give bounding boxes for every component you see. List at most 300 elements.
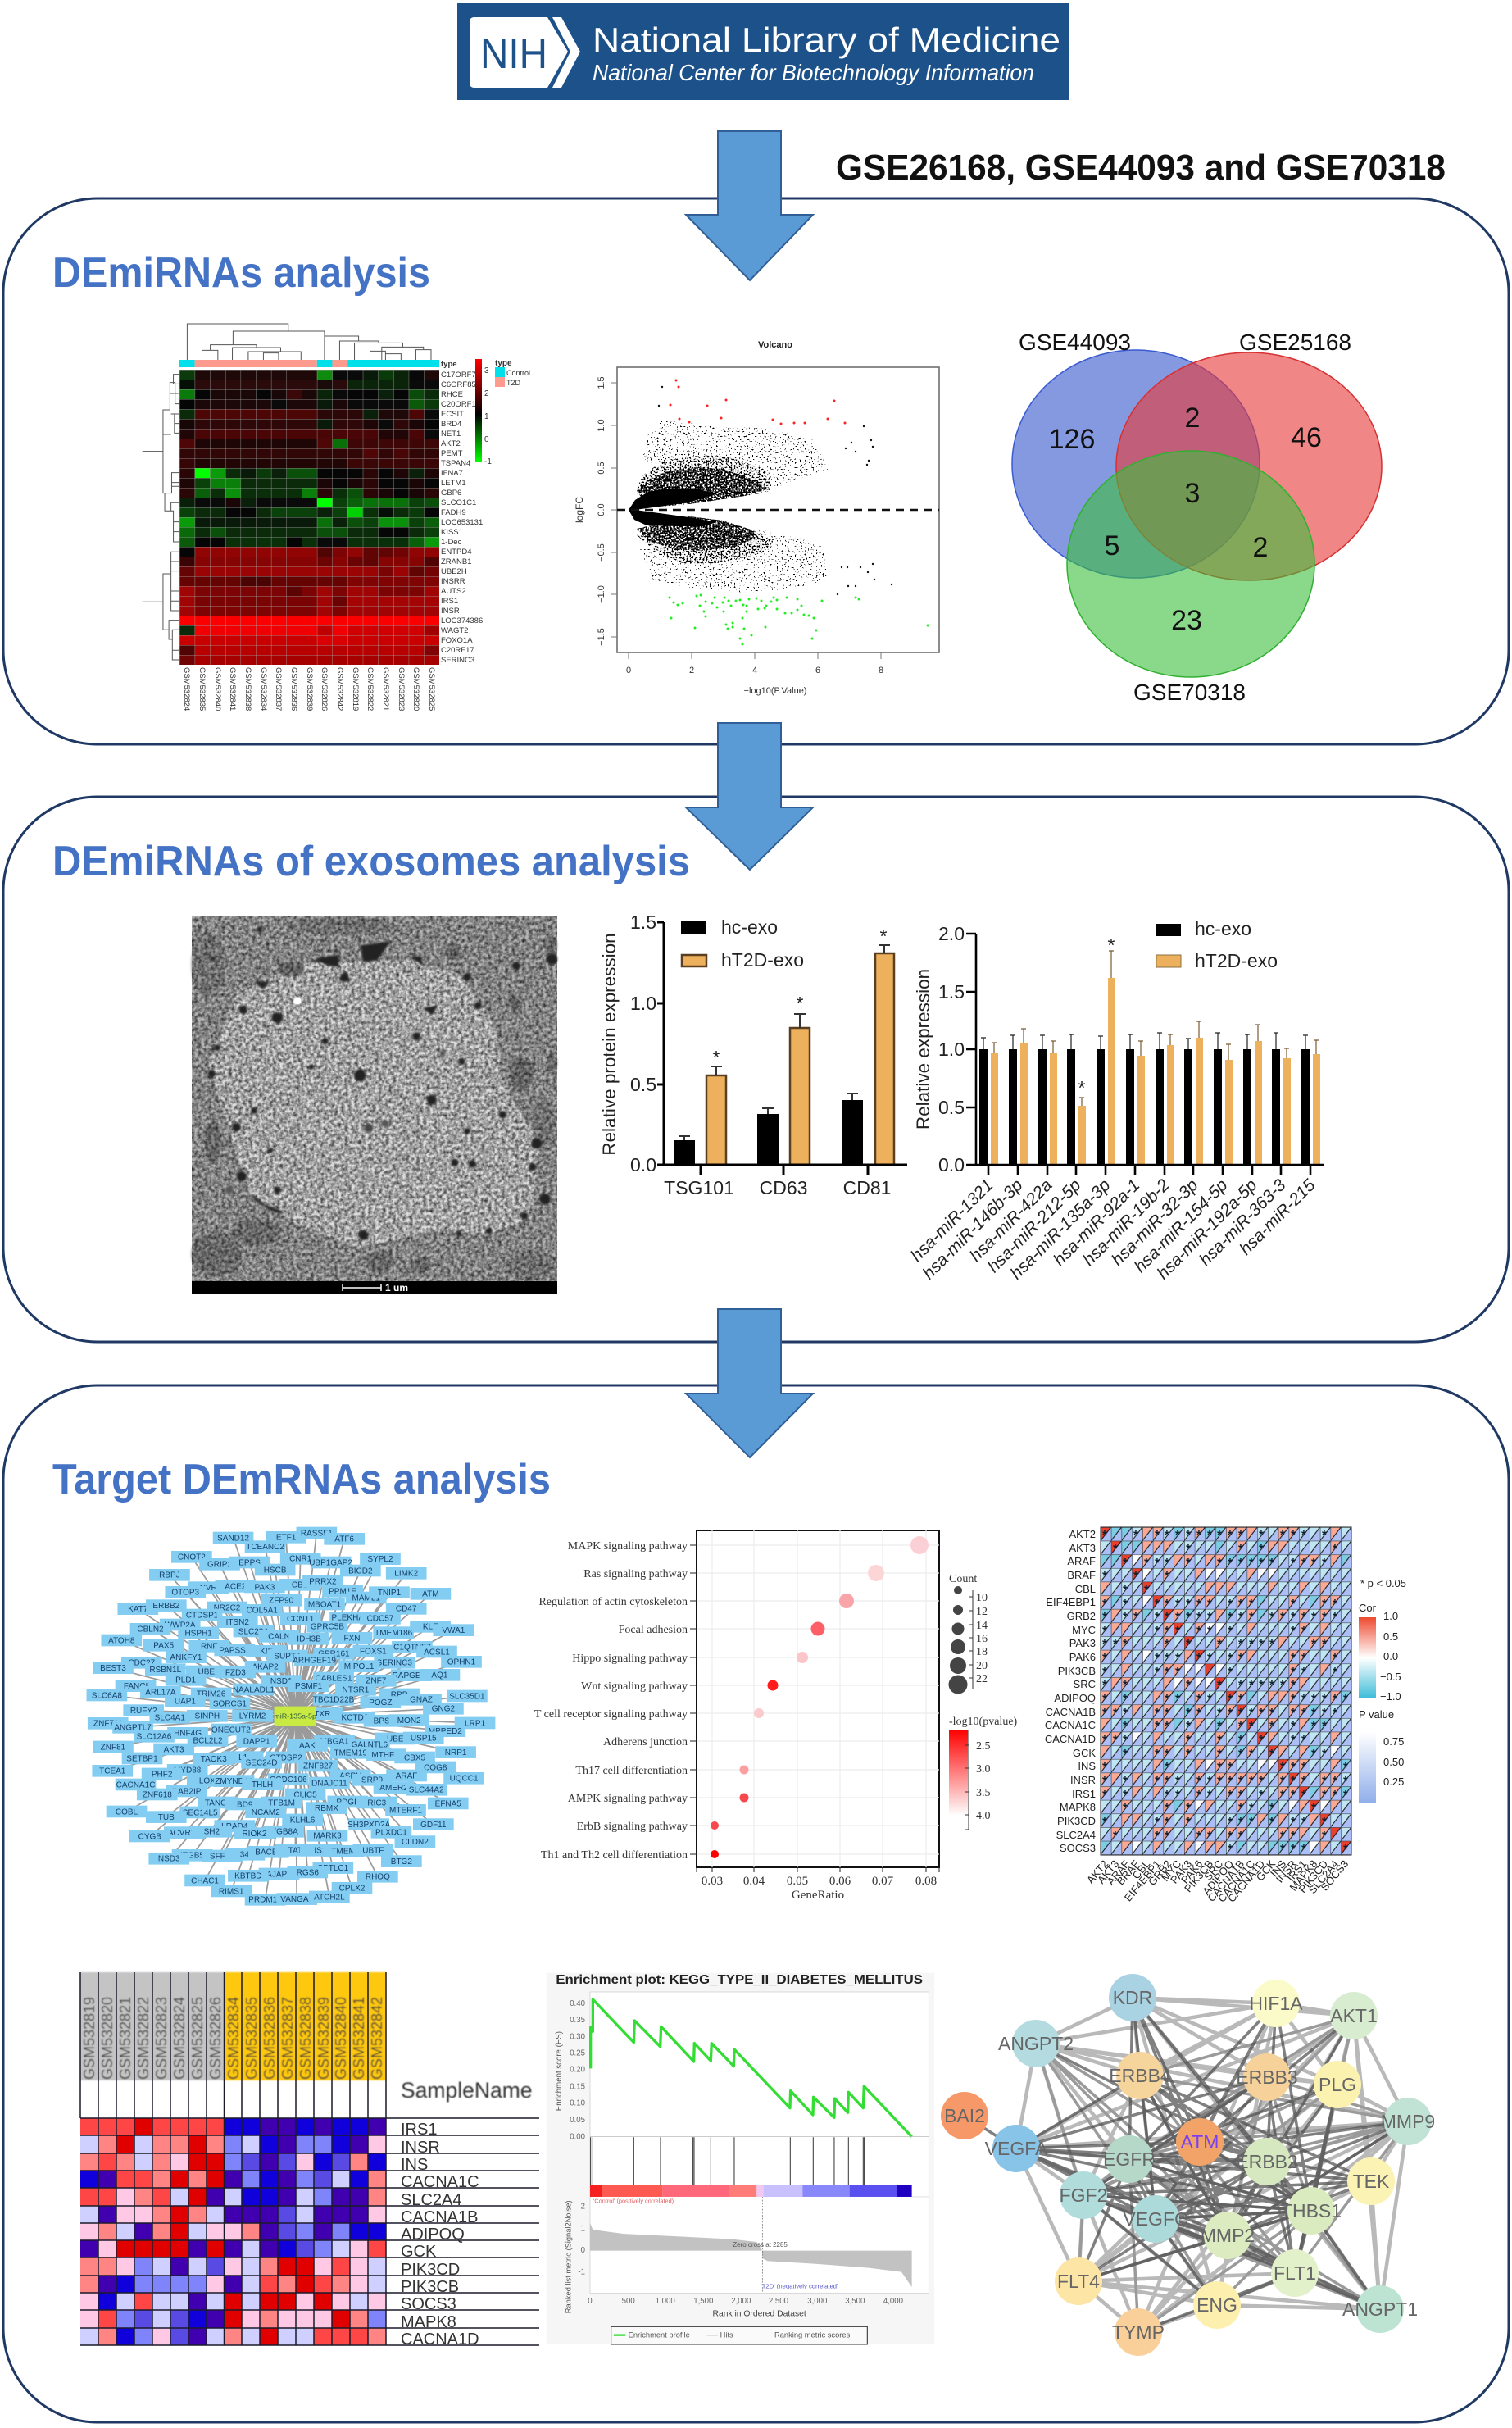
gene nodes: CBX5 [404,1753,426,1762]
gene labels: SLC2A4 [401,2191,462,2209]
arrow: database to DEmiRNAs analysis [686,131,813,280]
significance stars: ****************** [1102,1774,1348,1788]
gene nodes: MON2 [397,1716,421,1726]
gene nodes: TBC1D22B [313,1696,355,1705]
gene nodes: WWP2A [165,1621,196,1630]
gene row labels: PIK3CD [1057,1815,1096,1827]
GSEA enrichment plot [547,1973,934,2344]
KEGG dot plot: Th17 cell differentiation [575,1765,688,1777]
gene nodes: EFNA5 [435,1799,461,1808]
GSEA enrichment plot: 1,500 [693,2297,713,2306]
gene nodes: BCL2L2 [193,1737,223,1746]
bar chart: relative miRNA expression [907,918,1324,1283]
gene nodes: CABLES1 [316,1674,352,1683]
GSEA enrichment plot: Enrichment score (ES) [555,2031,564,2111]
sample header: GSM532819 [81,1997,98,2080]
significance stars: ******** [1102,1665,1337,1679]
panel: Target DEmRNAs analysis [3,1385,1509,2422]
GSEA enrichment plot: 'T2D' (negatively correlated) [761,2282,839,2289]
gene labels: PIK3CD [401,2261,460,2279]
gene nodes: HNF4G [174,1730,202,1739]
column labels: GSM532824 [182,667,191,711]
significance stars: *************** [1102,1788,1348,1802]
column labels [182,667,436,711]
KEGG dot plot: 0.04 [743,1875,765,1888]
bar chart: relative miRNA expression: 0.0 [938,1154,965,1175]
gene nodes: ACSL1 [424,1648,450,1657]
colour scale legend: 0 [484,435,489,444]
gene nodes: PDGF [336,1798,359,1807]
gene nodes: SEC14L5 [183,1808,218,1817]
dataset title: GSE26168, GSE44093 and GSE70318 [836,148,1446,188]
network nodes: BAI2 [944,2105,985,2126]
bar chart: relative miRNA expression: 1.5 [938,981,965,1003]
significance stars: ********* [1102,1624,1306,1638]
gene nodes: BICD2 [348,1566,373,1575]
gene nodes: LIMK2 [394,1570,418,1579]
heat cells [80,2118,386,2345]
gene column labels: SLC2A4 [1306,1857,1341,1896]
gene nodes: GPR161 [318,1650,350,1659]
row labels: FOXO1A [441,636,473,645]
network nodes: ENG [1196,2294,1237,2316]
significance stars: ******** [1102,1760,1348,1774]
gene nodes: TAT [288,1847,302,1856]
central miRNA node: miR-135a-5p [274,1712,316,1721]
volcano plot: 6 [815,666,820,675]
sample header [80,1972,533,2103]
gene column labels: CBL [1130,1857,1152,1881]
gene nodes: KCTD2 [342,1714,368,1723]
gene nodes: L1 [238,1753,247,1762]
row labels: PEMT [441,449,463,458]
gene labels [401,2121,479,2348]
gene nodes: RIMS1 [219,1887,243,1896]
central miRNA node [274,1707,316,1726]
gene nodes: FOXS1 [360,1647,387,1656]
gene row labels: MAPK8 [1060,1801,1096,1813]
p-value legend: 3.5 [976,1787,990,1799]
significance stars: ******************* [1102,1610,1337,1624]
bar chart: relative protein expression: 0.0 [630,1154,656,1175]
gene nodes: RSBN1L [149,1666,182,1675]
microRNA axis labels: hsa-miR-154-5p [1131,1175,1232,1276]
gene nodes: KLF [423,1623,438,1632]
gene nodes: IDH3B [297,1635,321,1644]
count legend: 18 [976,1646,988,1658]
row labels: SLCO1C1 [441,498,476,507]
column labels: GSM532835 [198,667,207,711]
gene nodes: MYD88 [174,1766,202,1776]
bar chart: relative miRNA expression: hT2D-exo [1195,950,1278,971]
p-value legend [949,1716,1018,1830]
gene nodes: BPSL [374,1717,395,1726]
network nodes: VEGFA [985,2138,1048,2159]
gene nodes: SERINC3 [377,1659,412,1668]
gene labels: SOCS3 [401,2295,456,2313]
volcano plot: 0.5 [597,462,606,475]
gene nodes: NSD3 [158,1855,180,1864]
gene column labels: ARAF [1105,1857,1132,1887]
GSEA enrichment plot: Ranked list metric (Signal2Noise) [565,2200,573,2313]
gene nodes: NAALADL1 [233,1685,275,1694]
gene nodes: ITGB8A [269,1828,298,1837]
gene nodes: SFRL1 [210,1852,235,1861]
row labels: C6ORF85 [441,380,476,389]
bar chart: relative miRNA expression: 0.5 [938,1097,965,1118]
gene nodes: MAML1 [352,1594,380,1603]
sample header: GSM532839 [316,1997,332,2080]
gene nodes: RIC3 [367,1798,387,1807]
gene nodes: UBTF [362,1847,384,1856]
column labels: GSM532834 [259,667,268,711]
KEGG dot plot: 0.06 [829,1875,851,1888]
significance stars: ********* [1102,1733,1306,1747]
p-value legend: 4.0 [976,1810,990,1822]
heading: Target DEmRNAs analysis: Target DEmRNAs analysis [52,1456,551,1503]
gene nodes: HSCB [264,1566,287,1575]
venn diagram: 23 [1171,605,1202,636]
gene row labels: INSR [1070,1774,1096,1786]
row labels: AKT2 [441,439,461,448]
gene nodes: ANKFY1 [170,1653,202,1662]
bar chart: relative miRNA expression: 1.0 [938,1039,965,1060]
KEGG dot plot: Wnt signaling pathway [581,1680,688,1693]
gene nodes: TFB1M [268,1798,295,1807]
colour scale legend: type [495,359,512,368]
gene labels: INS [401,2156,428,2174]
row labels: KISS1 [441,528,463,537]
network nodes: EGFR [1103,2148,1156,2170]
GSEA enrichment plot: 0.10 [570,2099,585,2108]
gene nodes: ZFP90 [269,1597,294,1606]
count legend: 10 [976,1592,988,1604]
sample header: GSM532837 [279,1997,296,2080]
GSEA enrichment plot: 0.15 [570,2082,585,2091]
gene nodes: PPM1E [329,1588,356,1597]
network nodes: ANGPT2 [998,2033,1074,2054]
gene row labels: SLC2A4 [1056,1829,1096,1841]
GSEA enrichment plot: 0.30 [570,2033,585,2042]
miRNA target network [87,1527,495,1906]
gene nodes: DAPP1 [243,1738,270,1747]
gene nodes: PSMF1 [295,1682,322,1691]
KEGG dot plot: MAPK signaling pathway [568,1540,688,1553]
gene nodes: ASPH [339,1771,361,1780]
gene nodes: FANCI [124,1682,148,1691]
GSEA enrichment plot: 0 [588,2297,593,2306]
gene nodes: ETF1 [276,1534,296,1543]
venn diagram: 46 [1291,422,1322,453]
rank colour band [590,2185,929,2197]
gene nodes: MTERF1 [389,1807,422,1816]
ranked metric area [590,2223,912,2287]
bar chart: relative protein expression: * [880,925,888,947]
sample header: GSM532823 [153,1997,170,2080]
gene nodes: LOX [199,1777,216,1786]
volcano plot: 0.0 [597,503,606,516]
GSEA enrichment plot: 2,500 [769,2297,788,2306]
sample header: GSM532842 [369,1997,385,2080]
volcano plot: 2 [689,666,694,675]
gene nodes: GNG2 [432,1705,455,1714]
gene nodes: UBE [198,1667,216,1676]
GSEA enrichment plot: 4,000 [883,2297,903,2306]
count legend: 22 [976,1673,988,1685]
heading: DEmiRNAs of exosomes analysis: DEmiRNAs of exosomes analysis [52,838,690,885]
outlying points [658,386,892,595]
gene column labels: MYC [1159,1857,1183,1884]
microRNA axis labels: hsa-miR-363-3 [1196,1175,1290,1270]
gene nodes: MIPOL1 [344,1662,374,1671]
gene nodes: HSPH1 [184,1629,212,1638]
volcano plot: 1.0 [597,419,606,432]
significance stars: ********** [1123,1747,1327,1761]
gene nodes: RBPJ [159,1571,180,1580]
gene nodes: SORCS1 [213,1699,247,1708]
venn diagram: 5 [1105,530,1119,562]
bar chart: relative protein expression: 0.5 [630,1074,656,1095]
gene nodes: C1QTNF7 [393,1644,431,1653]
bar chart: relative protein expression: CD81 [843,1177,891,1198]
row labels: C20RF17 [441,646,474,655]
volcano plot: −1.0 [597,585,606,603]
gene column labels: INSR [1274,1857,1299,1885]
significance stars: *********** [1102,1651,1337,1665]
electron microscope image [191,916,557,1294]
logo: NIH National Library of Medicine [457,3,1069,100]
row labels: ECSIT [441,410,464,419]
colour scale legend [475,359,530,466]
gene nodes: BEST3 [100,1664,126,1673]
significance stars: ****************** [1102,1706,1337,1720]
GSEA enrichment plot: 0.35 [570,2016,585,2025]
gene nodes: MBOAT1 [308,1600,341,1609]
gene nodes: AMER2 [379,1784,408,1793]
row labels: BRD4 [441,420,461,429]
count legend: 14 [976,1620,988,1632]
colour scale legend: 3 [484,366,489,375]
gene column labels: IRS1 [1284,1857,1309,1884]
gene column labels: PAK3 [1168,1857,1194,1886]
correlation legends: 1.0 [1383,1610,1398,1622]
gene nodes: TMEM19 [334,1749,367,1758]
KEGG dot plot: Ras signaling pathway [583,1568,688,1580]
correlation legends: Cor [1359,1602,1377,1614]
KEGG dot plot: GeneRatio [792,1889,844,1902]
gene row labels: ADIPOQ [1054,1692,1096,1704]
gene nodes: ATM [422,1590,439,1599]
KEGG dot plot: AMPK signaling pathway [568,1793,688,1805]
sample header: GSM532826 [207,1997,224,2080]
row labels: INSRR [441,577,465,586]
KEGG dot plot: Adherens junction [603,1736,688,1748]
gene nodes: RHOQ [366,1873,390,1882]
venn diagram: GSE25168 [1239,330,1351,355]
row labels: LOC653131 [441,518,483,527]
gene column labels: PAK6 [1178,1857,1205,1886]
gene labels: GCK [401,2243,437,2261]
gene nodes: PRRX2 [309,1577,337,1586]
KEGG dot plot: Hippo signaling pathway [572,1653,688,1665]
gene nodes: TRIM26 [197,1689,226,1698]
gene nodes: RBMX [315,1804,338,1813]
plot title: Enrichment plot: KEGG_TYPE_II_DIABETES_MELLITUS [556,1973,923,1987]
row labels: C17ORF76 [441,371,480,380]
microRNA axis labels: hsa-miR-32-3p [1108,1175,1202,1270]
gene nodes: CCNT1 [287,1615,314,1624]
gene nodes: SYPL2 [367,1555,393,1564]
gene row labels: MYC [1072,1624,1096,1636]
gene nodes: USP15 [411,1734,437,1743]
column labels: GSM532838 [243,667,252,711]
p-value legend: 3.0 [976,1763,990,1776]
gene row labels: PIK3CB [1058,1665,1096,1677]
gene nodes: POGZ [369,1698,392,1707]
gene column labels: AKT2 [1084,1857,1110,1886]
KEGG dot plot: T cell receptor signaling pathway [534,1708,688,1721]
gene row labels [1045,1528,1096,1854]
network nodes: ERBB3 [1236,2067,1298,2088]
column labels: GSM532825 [427,667,436,711]
gene nodes: ACVR2B [168,1829,201,1838]
gene nodes: CYGB [138,1832,161,1841]
gene nodes: SLC35D1 [449,1692,485,1701]
logo: NIH National Library of Medicine: National Center for Biotechnology Information [593,60,1034,85]
gene row labels: AKT3 [1069,1542,1096,1554]
gene nodes: COG8 [424,1763,447,1772]
gene nodes: CDC27 [128,1659,155,1668]
row labels: type [441,360,457,369]
bar chart: relative protein expression: 1.5 [630,912,656,933]
sample header: GSM532825 [189,1997,206,2080]
gene nodes: CTDSP2 [270,1753,302,1762]
gene nodes: SLC12A6 [137,1733,172,1742]
gene column labels: MAPK8 [1287,1857,1319,1894]
gene labels: CACNA1D [401,2330,479,2348]
gene labels: CACNA1B [401,2208,478,2226]
logo: NIH National Library of Medicine: National Library of Medicine [593,20,1060,59]
sample header: GSM532822 [135,1997,152,2080]
volcano plot: 1.5 [597,376,606,389]
row labels: IRS1 [441,597,458,606]
gene row labels: PAK6 [1069,1651,1096,1663]
gene nodes: PLXDC1 [375,1829,407,1838]
gene nodes: SUPT4 [274,1652,301,1661]
network nodes: ERBB2 [1236,2151,1298,2172]
gene nodes: PAX5 [153,1642,175,1651]
significance stars: ************** [1102,1692,1348,1706]
microRNA axis labels: hsa-miR-92a-1 [1050,1175,1144,1270]
volcano plot: −1.5 [597,628,606,646]
gene nodes: CDC57 [367,1615,393,1624]
volcano plot: −log10(P.Value) [744,686,806,696]
panel: DEmiRNAs analysis [3,198,1509,744]
gene nodes: OPHN1 [447,1658,475,1667]
gene nodes: MBGA1 [320,1737,349,1746]
gene row labels: CACNA1D [1045,1733,1096,1745]
sample header: GSM532836 [261,1997,278,2080]
gene nodes: TMEM186 [375,1629,413,1638]
gene nodes: PLD1 [175,1676,196,1685]
KEGG dot plot: 0.07 [872,1875,894,1888]
gene nodes: NR2C2 [214,1603,240,1612]
gene nodes: PRDM10 [248,1896,282,1905]
GSEA enrichment plot: 3,500 [845,2297,865,2306]
significance stars: ********** [1102,1678,1296,1692]
gene nodes: CACNA1C [116,1780,155,1789]
gene nodes: 34 [240,1851,249,1860]
volcano plot: 0 [626,666,631,675]
volcano plot: 4 [752,666,757,675]
network nodes: MMP9 [1381,2111,1435,2132]
row labels: NET1 [441,430,461,439]
count legend: 16 [976,1633,988,1645]
gene column labels: ADIPOQ [1200,1857,1236,1898]
gene row labels: EIF4EBP1 [1046,1596,1096,1608]
gene row labels: SOCS3 [1060,1842,1096,1854]
KEGG dot plot: Regulation of actin cytoskeleton [538,1596,688,1608]
row labels [441,360,483,665]
gene nodes: DNAJC11 [311,1779,347,1788]
network nodes [941,1974,1435,2356]
column labels: GSM532820 [411,667,420,711]
plot legend: Ranking metric scores [774,2331,851,2339]
gene nodes: TXR [314,1710,330,1719]
gene nodes: ONECUT2 [211,1726,251,1735]
GSEA enrichment plot: 1,000 [656,2297,675,2306]
gene row labels: GRB2 [1067,1610,1096,1622]
count legend [949,1573,988,1694]
bar chart: relative protein expression: * [797,993,804,1014]
gene nodes: RASSF1 [301,1529,333,1538]
KEGG dot plot: Focal adhesion [619,1624,688,1636]
gene nodes: SRP9 [361,1776,383,1785]
gene nodes: EPPS [238,1558,261,1567]
gene nodes: KAT7 [128,1605,148,1614]
venn diagram: GSE44093 [1019,330,1131,355]
network nodes: VEGFC [1123,2208,1188,2230]
volcano plot: 8 [879,666,883,675]
significance stars: ***** [1113,1542,1337,1556]
significance stars: ********** [1113,1829,1327,1843]
GSEA enrichment plot: Zero cross at 2285 [733,2241,788,2248]
gene column labels: AKT3 [1095,1857,1121,1886]
gene row labels: CBL [1075,1583,1096,1595]
gene labels: INSR [401,2139,440,2157]
column labels: GSM532821 [381,667,390,711]
correlation legends: 0.25 [1383,1776,1404,1788]
column labels: GSM532826 [320,667,329,711]
gene nodes: RNF [201,1643,218,1652]
bar chart: relative protein expression: CD63 [760,1177,807,1198]
gene nodes: GNAZ [410,1696,433,1705]
gene nodes: ARHGEF19 [293,1656,336,1665]
KEGG dot plot: Th1 and Th2 cell differentiation [541,1849,688,1862]
gene nodes: NRP1 [445,1748,466,1757]
gene column labels: SRC [1201,1857,1225,1883]
gene nodes: ZMYND10 [215,1777,253,1786]
microRNA axis labels: hsa-miR-135a-3p [1007,1175,1115,1283]
gene column labels: EIF4EBP1 [1122,1857,1163,1903]
gene nodes: COBL [116,1807,138,1816]
colour scale legend: Control [506,369,530,377]
gene nodes: SLC44A2 [409,1786,444,1795]
GSEA enrichment plot: 500 [622,2297,635,2306]
gene nodes: LRP1 [465,1719,485,1728]
plot legend: Hits [720,2331,733,2339]
row labels: 1-Dec [441,538,462,547]
